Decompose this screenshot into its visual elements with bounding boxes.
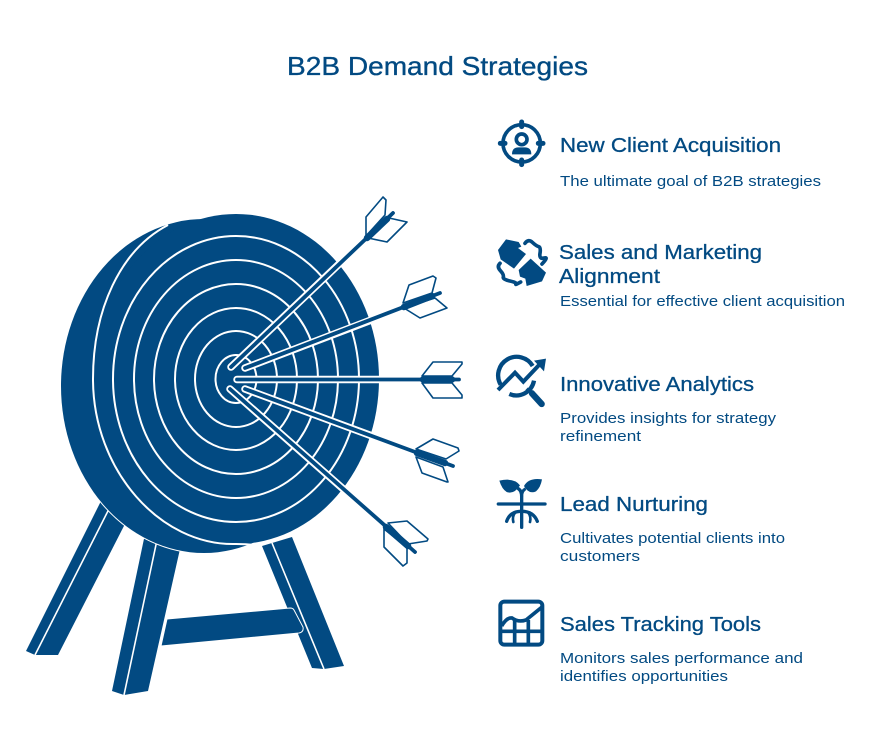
stand: right leg (262, 537, 344, 669)
title: B2B Demand Strategies (287, 51, 588, 81)
description: Cultivates potential clients into (560, 530, 785, 547)
description: Essential for effective client acquisition (560, 293, 845, 310)
description: identifies opportunities (560, 668, 728, 685)
stand: middle leg (112, 534, 180, 695)
target illustration with stand and arrows (26, 197, 462, 695)
description (560, 530, 785, 565)
icon: magnifier with trend arrow (498, 357, 546, 404)
icon: chart in grid (500, 602, 542, 645)
description: Provides insights for strategy (560, 410, 777, 427)
icon: two shapes with squiggles (498, 239, 546, 286)
heading: Lead Nurturing (560, 494, 708, 516)
target disc (61, 214, 379, 553)
arrow 5 (230, 389, 428, 566)
description: Monitors sales performance and (560, 650, 803, 667)
item: Innovative Analytics (498, 357, 777, 445)
heading (559, 242, 762, 288)
item: Sales Tracking Tools (500, 602, 803, 685)
stand: left leg (26, 497, 127, 655)
arrow 2 (245, 276, 447, 368)
item: Lead Nurturing (498, 479, 785, 565)
description (560, 410, 777, 445)
description: customers (560, 548, 640, 565)
arrow 3 (237, 362, 462, 398)
item: Sales and Marketing Alignment (498, 239, 845, 310)
icon: sprout with roots (498, 479, 545, 527)
arrow 4 (245, 389, 459, 482)
heading: Sales Tracking Tools (560, 614, 761, 636)
description: The ultimate goal of B2B strategies (560, 173, 821, 190)
description: refinement (560, 428, 642, 445)
description (560, 650, 803, 685)
item: New Client Acquisition (500, 122, 821, 190)
heading: Innovative Analytics (560, 374, 754, 396)
icon: crosshair with person (500, 122, 543, 165)
heading: Alignment (559, 266, 661, 288)
heading: Sales and Marketing (559, 242, 762, 264)
heading: New Client Acquisition (560, 135, 781, 157)
arrow 1 (231, 197, 407, 367)
stand: crossbar (161, 608, 303, 646)
